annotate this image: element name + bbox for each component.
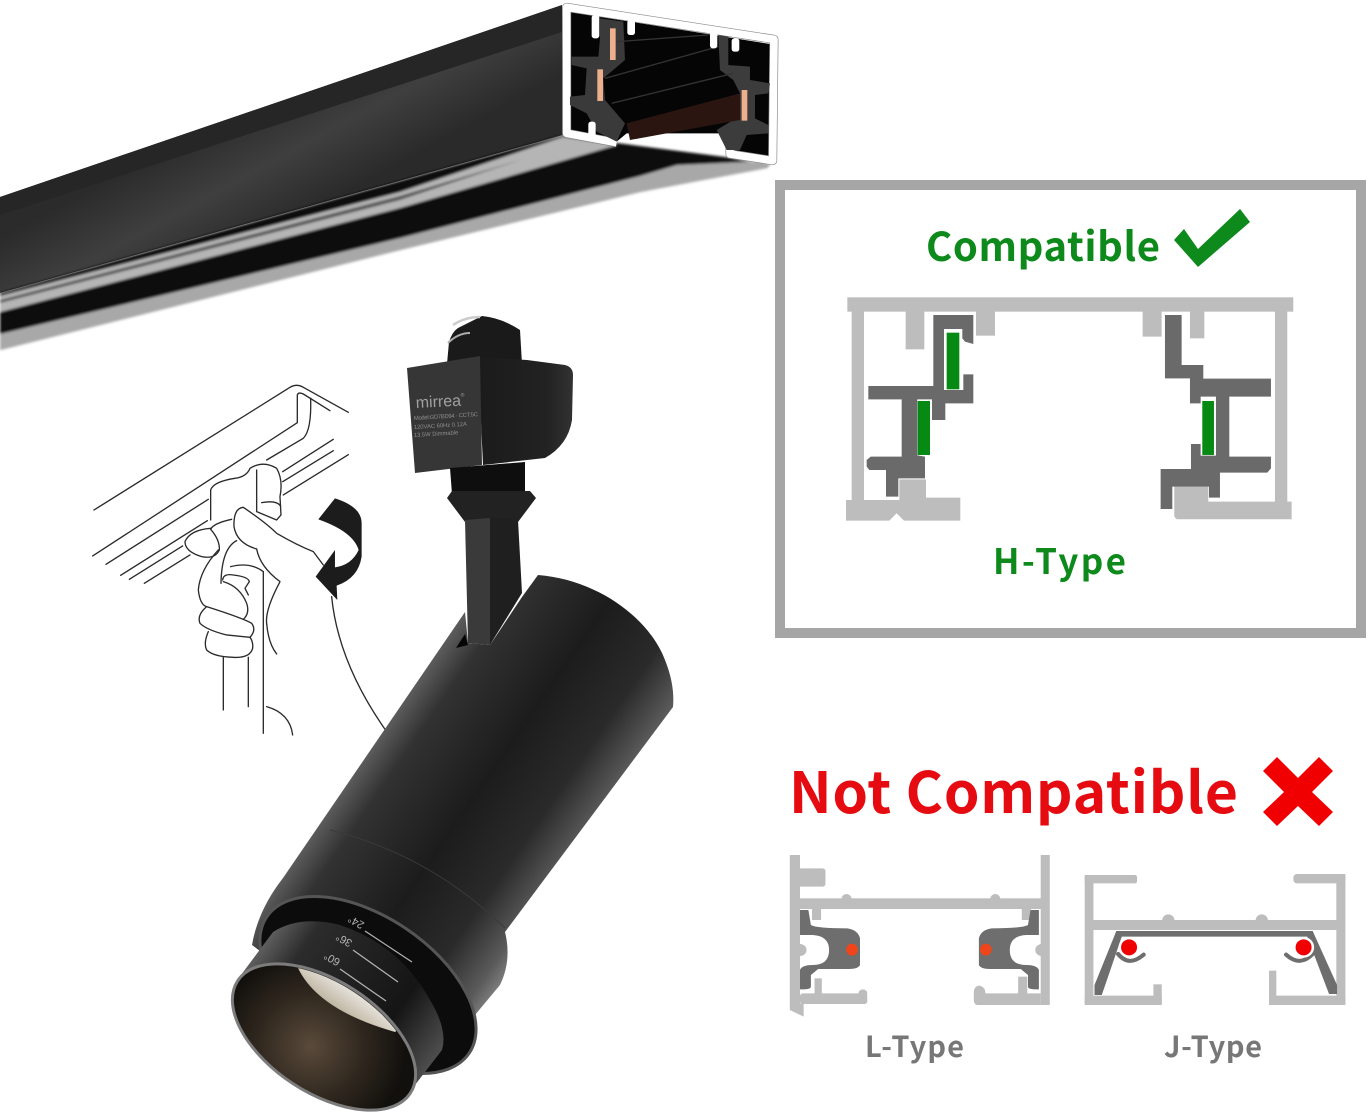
diagram: H-type track	[846, 297, 1293, 521]
brand label: mirrea	[415, 393, 461, 412]
zoom scale: 36°	[334, 930, 354, 949]
track rail photo	[0, 5, 774, 350]
flange ring	[229, 860, 507, 1110]
label: L-Type: L-Type	[865, 1024, 964, 1066]
diagrams: L-type and J-type tracks	[790, 855, 1345, 1017]
zoom scale	[322, 912, 412, 1001]
label: J-Type: J-Type	[1164, 1024, 1262, 1066]
rail underside	[0, 135, 770, 350]
spec text: 13.5W Dimmable	[414, 430, 459, 439]
track adapter	[407, 316, 573, 494]
cylinder body	[252, 575, 673, 1075]
heading: Not Compatible: Not Compatible	[789, 748, 1238, 830]
rail end profile	[567, 7, 774, 161]
lens barrel	[238, 921, 444, 1094]
spec text: 120VAC 60Hz 0.12A	[414, 422, 467, 431]
diagram: J-type track	[1085, 874, 1345, 1005]
rail side face	[0, 5, 563, 293]
icon: check mark	[1174, 209, 1250, 267]
spotlight fixture	[207, 316, 673, 1119]
diagram: L-type track	[790, 855, 1050, 1017]
spec text	[414, 412, 478, 439]
body seam	[330, 830, 505, 928]
icon: cross mark	[1263, 757, 1333, 826]
label: H-Type: H-Type	[993, 534, 1126, 585]
hand installation illustration	[93, 385, 387, 735]
panel: not compatible	[789, 748, 1345, 1066]
neck and stem	[447, 491, 536, 645]
icon: rotation arrow	[316, 498, 362, 600]
heading: Compatible: Compatible	[926, 215, 1160, 273]
brand label: ®	[461, 391, 465, 399]
panel: compatible	[780, 185, 1361, 633]
spec text: Model:GD7BD94 · CCT:5C	[414, 412, 478, 422]
lens opening	[230, 962, 418, 1112]
zoom scale: 24°	[346, 912, 366, 931]
zoom scale: 60°	[322, 949, 342, 968]
